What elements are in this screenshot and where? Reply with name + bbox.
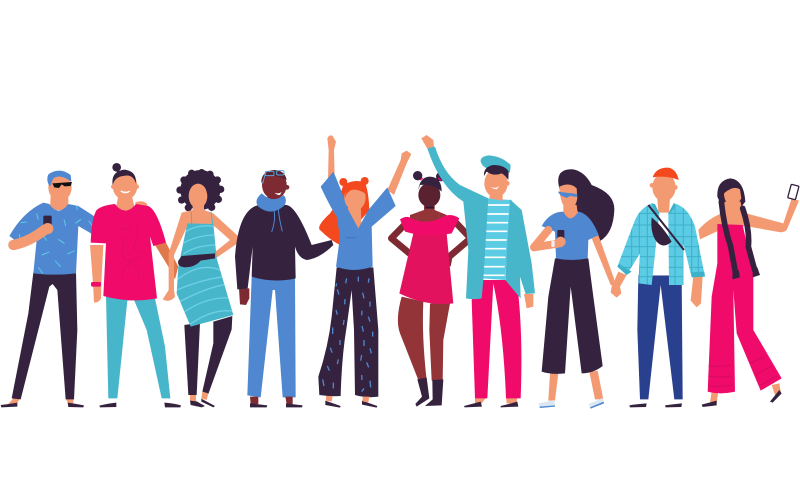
far arm <box>155 243 178 279</box>
phone <box>788 184 799 200</box>
arms <box>391 221 471 256</box>
hair fringe <box>345 183 367 198</box>
ears <box>111 184 139 189</box>
arms and shoulders <box>163 202 242 301</box>
head <box>189 184 207 208</box>
pink t-shirt <box>91 204 166 300</box>
legs <box>398 297 450 381</box>
smile <box>121 191 130 193</box>
navy jeans <box>637 275 683 399</box>
legs <box>548 371 603 401</box>
head <box>559 185 577 209</box>
person 6: woman with hair buns in pink dress <box>391 171 471 407</box>
smile <box>275 192 282 195</box>
curly hair <box>176 169 224 211</box>
striped shirt <box>483 198 512 280</box>
pink trousers <box>472 280 521 398</box>
person 2: man with top knot in pink shirt <box>90 163 181 407</box>
hand <box>239 288 249 305</box>
hair back and buns <box>319 177 369 245</box>
neck and chest <box>347 205 362 232</box>
trouser pattern <box>323 277 373 392</box>
head <box>113 172 137 200</box>
illustration: row of ten diverse people <box>0 135 800 409</box>
teal jacket <box>427 147 535 299</box>
ears <box>650 183 678 190</box>
bag strap <box>648 205 684 250</box>
pink skirt <box>399 233 453 304</box>
ankles and shoes <box>250 397 303 407</box>
neck <box>50 195 68 210</box>
checked shirt <box>617 203 704 285</box>
teal trousers <box>106 297 170 398</box>
phone <box>43 216 52 226</box>
person 9: man with red hair and checked shirt holding hands <box>611 168 707 407</box>
head <box>262 171 287 199</box>
neck and chest <box>717 202 744 227</box>
neck strap lines <box>417 212 440 222</box>
belt bag <box>178 253 215 267</box>
person 10: woman with braids taking a selfie <box>698 178 799 407</box>
jumpsuit hem lines <box>708 357 777 386</box>
raised arms <box>327 135 411 195</box>
dress straps <box>191 212 213 224</box>
far arm <box>592 235 615 287</box>
dark hoodie <box>235 205 333 289</box>
hands on hips <box>410 255 453 267</box>
forearm holding phone <box>13 228 47 245</box>
blue blouse <box>321 172 396 270</box>
neck <box>115 195 136 213</box>
cap <box>481 155 511 173</box>
blue t-shirt <box>542 212 599 260</box>
boots <box>415 378 443 407</box>
feet and shoes <box>190 392 215 407</box>
hood <box>256 193 286 212</box>
selfie arm <box>740 198 799 232</box>
shoes <box>99 403 181 407</box>
sunglasses <box>52 182 72 188</box>
blue jeans <box>247 277 296 397</box>
hair top <box>717 178 745 210</box>
red hair <box>653 168 679 180</box>
right hand <box>524 294 533 308</box>
dress waves <box>177 226 237 327</box>
white undershirt <box>652 212 669 275</box>
head <box>724 188 741 205</box>
left arm and held hands <box>611 272 627 298</box>
ankles <box>326 396 369 403</box>
hair and bun <box>112 163 136 185</box>
head <box>418 183 440 207</box>
hair <box>261 170 287 183</box>
feet and shoes <box>1 398 84 407</box>
check pattern <box>617 203 707 287</box>
shirt stripes <box>483 205 509 275</box>
shirt pattern <box>118 223 142 277</box>
buns <box>413 171 445 181</box>
bag pouch <box>651 217 672 245</box>
trousers <box>12 272 77 399</box>
blouse crease <box>346 236 356 239</box>
hood strings <box>272 209 282 232</box>
ear <box>285 185 289 190</box>
shoes <box>629 403 682 407</box>
person 1: man with blue hair and sunglasses <box>1 171 147 407</box>
feet <box>710 383 781 403</box>
long hair <box>558 169 614 241</box>
shoes <box>325 401 377 408</box>
hand and bracelet <box>551 237 566 247</box>
hand raised <box>421 135 434 149</box>
phone <box>557 230 564 239</box>
person 8: woman with long dark hair and blue glasses <box>534 169 615 409</box>
hand resting on neighbour's shoulder <box>135 201 147 209</box>
bracelet <box>91 282 101 287</box>
near arm <box>90 245 103 302</box>
hand <box>42 223 53 234</box>
sneakers <box>538 398 604 409</box>
glasses on head <box>263 171 284 183</box>
ear <box>505 181 510 186</box>
trousers <box>542 258 603 374</box>
choker <box>425 207 434 209</box>
pink jumpsuit <box>708 224 782 393</box>
shirt pattern <box>19 206 92 273</box>
pink bodice <box>400 215 459 235</box>
hair ties <box>420 178 441 181</box>
blue hair <box>47 171 71 187</box>
right arm and hand <box>691 276 703 307</box>
shoes <box>702 390 782 407</box>
hair <box>484 165 509 180</box>
blue t-shirt <box>9 203 96 275</box>
chest and neck <box>410 203 447 230</box>
person 3: woman with curly hair in teal dress <box>163 169 242 407</box>
person 7: man with teal cap and jacket, arm raised <box>421 135 535 407</box>
person 4: man in dark hoodie <box>235 170 333 407</box>
neck <box>267 195 281 205</box>
ankles and shoes <box>464 397 518 407</box>
teal dress <box>177 223 233 327</box>
head <box>48 174 72 201</box>
braids <box>721 202 755 272</box>
trouser legs <box>184 316 232 395</box>
trousers <box>318 267 378 397</box>
head <box>344 185 366 210</box>
neck <box>489 193 503 201</box>
hair fringe <box>188 180 217 198</box>
neck <box>657 198 670 213</box>
forearm <box>534 230 560 247</box>
person 5: woman with red hair, both arms raised <box>318 135 411 408</box>
head <box>484 169 508 197</box>
cuffs and collar <box>617 203 705 277</box>
neck <box>563 205 578 218</box>
head <box>652 173 676 201</box>
hair <box>418 177 442 192</box>
blue glasses <box>558 192 577 198</box>
smile <box>491 186 499 189</box>
braid tassels <box>732 267 760 279</box>
far arm <box>698 213 723 239</box>
